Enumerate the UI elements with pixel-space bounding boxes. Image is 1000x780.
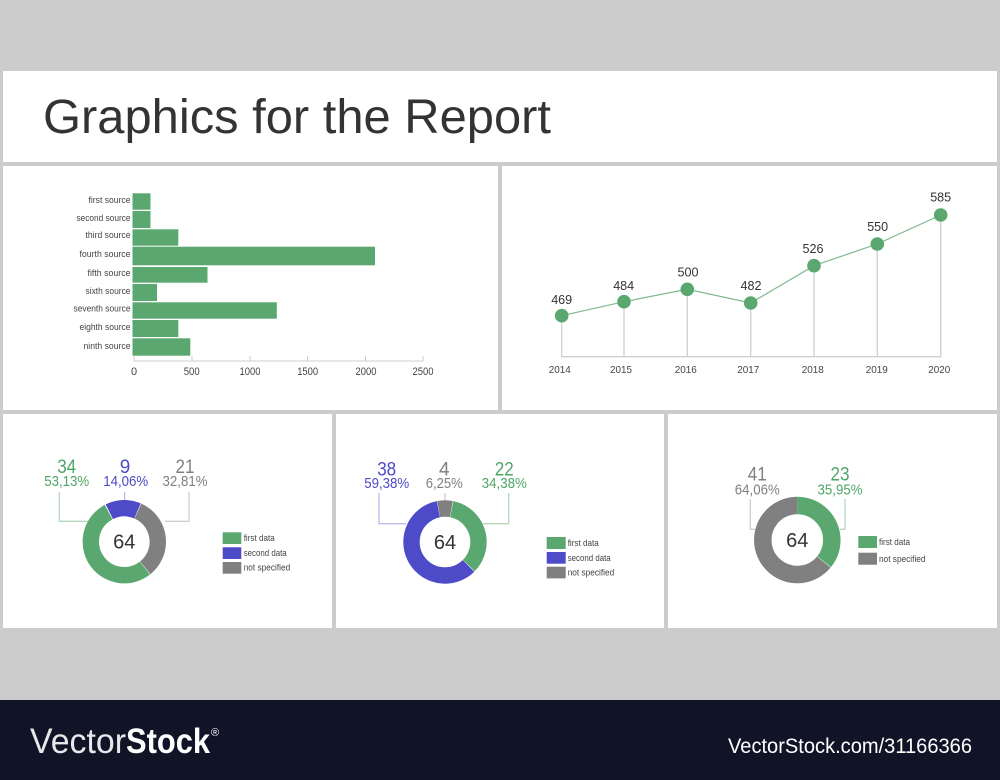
category labels: fifth source <box>88 268 130 278</box>
not specified value: 6,25% <box>426 475 463 492</box>
panel: donut two <box>336 414 664 628</box>
second data value: 14,06% <box>103 473 148 490</box>
donut chart <box>749 491 846 589</box>
second data value: 38 <box>377 460 396 480</box>
not specified value: 41 <box>748 464 767 486</box>
legend: second data <box>244 548 287 558</box>
donut chart <box>77 495 171 589</box>
donut total: 64 <box>434 532 456 554</box>
category labels: first source <box>88 195 130 205</box>
legend <box>858 536 926 565</box>
donut total: 64 <box>113 532 135 554</box>
not specified value: 4 <box>439 460 450 480</box>
year labels: 2015 <box>610 364 632 376</box>
legend: first data <box>244 533 275 543</box>
legend <box>547 537 614 578</box>
panel: donut three <box>668 414 997 628</box>
legend: not specified <box>244 562 290 572</box>
category labels: ninth source <box>84 341 130 351</box>
panel: title <box>3 71 997 162</box>
category labels: eighth source <box>80 322 130 332</box>
category labels: seventh source <box>74 304 130 314</box>
footer image id: VectorStock.com/31166366 <box>728 735 972 758</box>
year labels: 2018 <box>802 364 824 376</box>
category labels <box>74 195 130 351</box>
value labels: 526 <box>802 241 824 256</box>
footer logo: Vector <box>30 722 126 761</box>
second data value: 9 <box>120 457 130 478</box>
x axis labels: 500 <box>184 366 200 378</box>
leader lines <box>59 492 189 521</box>
legend: first data <box>568 538 599 548</box>
donut total: 64 <box>786 530 808 552</box>
first data value <box>44 457 89 490</box>
panel: line chart <box>502 166 997 410</box>
first data value: 23 <box>830 464 850 486</box>
category labels: second source <box>76 213 130 223</box>
footer logo: Stock <box>126 722 210 761</box>
leader lines <box>379 493 509 524</box>
footer logo: ® <box>211 727 219 739</box>
heading: Graphics for the Report <box>43 91 551 144</box>
first data value: 34,38% <box>482 475 527 492</box>
first data value: 53,13% <box>44 473 89 490</box>
panel: horizontal bar chart <box>3 166 498 410</box>
category labels: fourth source <box>80 249 130 259</box>
legend: second data <box>568 553 611 563</box>
category labels: sixth source <box>86 286 130 296</box>
year labels: 2016 <box>675 364 697 376</box>
legend <box>223 532 290 574</box>
first data value: 34 <box>57 457 77 478</box>
drop lines and baseline <box>562 215 941 357</box>
year labels: 2014 <box>549 364 571 376</box>
not specified value: 21 <box>176 457 194 478</box>
not specified value: 64,06% <box>735 482 780 498</box>
panel: donut one <box>3 414 332 628</box>
first data value <box>482 460 527 492</box>
first data value: 35,95% <box>818 482 862 498</box>
x axis labels: 1500 <box>297 366 318 378</box>
x axis <box>134 356 423 361</box>
value labels: 500 <box>678 264 698 280</box>
x axis labels: 2000 <box>356 366 376 378</box>
year labels: 2020 <box>928 364 950 376</box>
x axis labels <box>131 366 434 378</box>
footer logo <box>30 722 219 761</box>
first data value: 22 <box>495 460 514 480</box>
donut chart <box>398 495 492 589</box>
value labels: 550 <box>867 219 888 234</box>
year labels: 2017 <box>737 364 759 376</box>
value labels: 469 <box>551 292 572 307</box>
legend: not specified <box>568 568 614 578</box>
value labels: 585 <box>930 190 951 204</box>
first data value <box>818 464 862 498</box>
not specified value: 32,81% <box>162 473 208 490</box>
x axis labels: 1000 <box>240 366 260 378</box>
not specified value <box>162 457 208 490</box>
data points <box>555 208 948 323</box>
second data value <box>364 460 409 492</box>
not specified value <box>735 464 780 498</box>
value labels: 484 <box>613 278 634 293</box>
trend line <box>562 215 941 316</box>
second data value <box>103 457 148 490</box>
x axis labels: 0 <box>131 366 137 378</box>
second data value: 59,38% <box>364 475 409 492</box>
category labels: third source <box>86 230 130 240</box>
leader lines <box>750 499 845 529</box>
legend: first data <box>879 537 910 547</box>
x axis labels: 2500 <box>412 366 434 378</box>
year labels: 2019 <box>866 364 888 376</box>
not specified value <box>426 460 463 492</box>
bars <box>132 193 375 356</box>
value labels: 482 <box>740 278 762 293</box>
value labels <box>551 190 951 307</box>
legend: not specified <box>879 554 926 564</box>
footer band <box>0 700 1000 780</box>
year labels <box>549 364 950 376</box>
